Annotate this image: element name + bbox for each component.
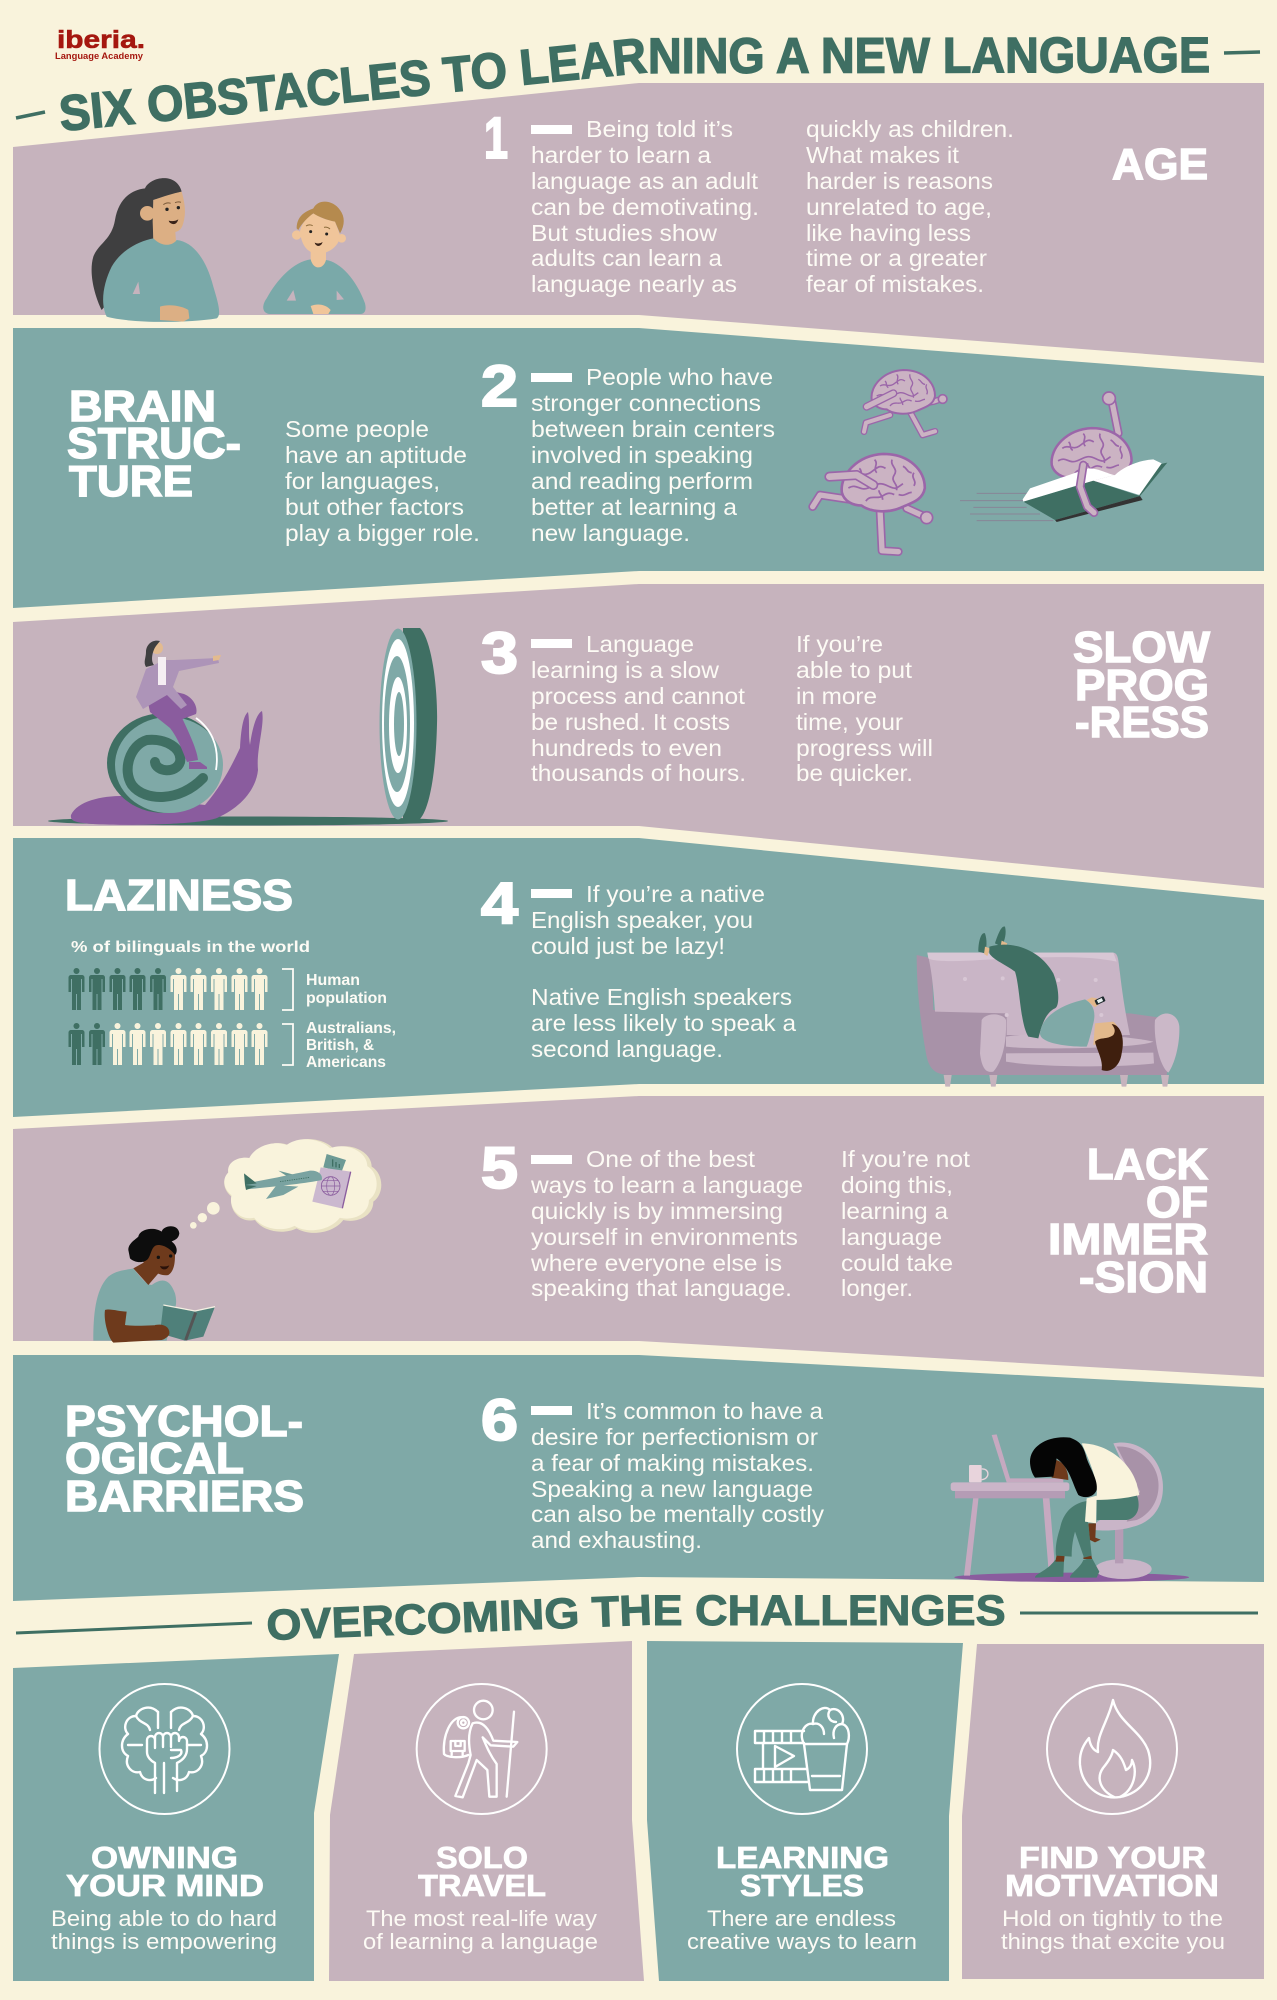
- text: more time: able to put: [796, 657, 913, 683]
- card text: There are endless: [707, 1906, 896, 1931]
- text: connections: People who have: [586, 364, 773, 390]
- text: native speaker: English speaker, you: [531, 907, 753, 933]
- heading: lack of immersion: OF: [1146, 1178, 1208, 1227]
- text: more time: in more: [796, 683, 877, 709]
- card heading: [66, 1840, 264, 1903]
- card heading: [1005, 1840, 1219, 1903]
- card heading: [418, 1840, 546, 1903]
- text: if not: [841, 1146, 971, 1301]
- text: if not: language: [841, 1224, 942, 1250]
- text: perfectionism: Speaking a new language: [531, 1476, 813, 1502]
- panel: lack of immersion: [13, 1096, 1264, 1377]
- card text: The most real-life way: [366, 1906, 597, 1931]
- card text: [51, 1906, 277, 1954]
- text: slow process: learning is a slow: [531, 657, 719, 683]
- text: age left: harder to learn a: [531, 142, 711, 168]
- panel: laziness: [13, 838, 1264, 1117]
- card text: [363, 1906, 598, 1954]
- text: if not: longer.: [841, 1275, 913, 1301]
- text: slow process: be rushed. It costs: [531, 709, 730, 735]
- heading: lack of immersion: LACK: [1087, 1140, 1208, 1189]
- text: if not: could take: [841, 1250, 953, 1276]
- card: solo travel: [329, 1641, 644, 1981]
- text: perfectionism: and exhausting.: [531, 1527, 702, 1553]
- text: if not: If you’re not: [841, 1146, 971, 1172]
- card: owning your mind: [13, 1654, 339, 1981]
- text: perfectionism: It’s common to have a: [586, 1398, 823, 1424]
- row: australians, british, americans: [68, 1023, 268, 1065]
- illustration: reader dreaming of travel: [93, 1139, 381, 1343]
- text: immersion: speaking that language.: [531, 1275, 792, 1301]
- number 1: 1: [484, 106, 508, 171]
- text: perfectionism: desire for perfectionism or: [531, 1424, 818, 1450]
- icon: hiker: [417, 1684, 547, 1814]
- text: aptitude: Some people: [285, 416, 429, 442]
- number 2: 2: [481, 354, 518, 419]
- reader: [93, 1226, 215, 1343]
- text: immersion: yourself in environments: [531, 1224, 798, 1250]
- panel: age: [13, 83, 1264, 363]
- brain runner bottom: [813, 454, 933, 552]
- heading: age: AGE: [1112, 140, 1208, 189]
- card heading: [716, 1840, 889, 1903]
- heading: psychological barriers: PSYCHOL-: [65, 1397, 303, 1446]
- number 4: 4: [481, 871, 518, 936]
- text: age right: like having less: [806, 220, 971, 246]
- card heading: MOTIVATION: [1005, 1868, 1219, 1903]
- text: more time: time, your: [796, 709, 903, 735]
- card heading: FIND YOUR: [1019, 1840, 1206, 1875]
- text: if not: doing this,: [841, 1172, 953, 1198]
- text: age left: But studies show: [531, 220, 717, 246]
- panel: psychological barriers: [13, 1355, 1264, 1601]
- text: immersion: [530, 1146, 803, 1301]
- heading: lack of immersion: [1048, 1140, 1208, 1302]
- text: perfectionism: can also be mentally costly: [531, 1501, 825, 1527]
- text: age right: unrelated to age,: [806, 194, 992, 220]
- text: age right: [806, 116, 1014, 297]
- card heading: SOLO: [436, 1840, 528, 1875]
- heading: brain structure: TURE: [69, 457, 193, 506]
- text: connections: involved in speaking: [531, 442, 753, 468]
- heading: brain structure: BRAIN: [69, 382, 216, 431]
- heading: slow progress: SLOW: [1073, 623, 1210, 672]
- text: native speaker: are less likely to speak a: [531, 1010, 796, 1036]
- chart: percent of bilinguals: population: [306, 990, 387, 1007]
- text: aptitude: for languages,: [285, 468, 440, 494]
- text: age right: quickly as children.: [806, 116, 1014, 142]
- panel: brain structure: [13, 328, 1264, 608]
- title: SIX OBSTACLES TO LEARNING A NEW LANGUAGE: [60, 36, 1209, 131]
- text: immersion: One of the best: [586, 1146, 756, 1172]
- brain reader on book: [1023, 392, 1167, 522]
- card heading: STYLES: [740, 1868, 864, 1903]
- heading: psychological barriers: [65, 1397, 304, 1521]
- chart: percent of bilinguals: [68, 939, 396, 1071]
- card text: things is empowering: [51, 1929, 277, 1954]
- card text: creative ways to learn: [687, 1929, 917, 1954]
- illustration: person upside down on sofa: [917, 926, 1179, 1087]
- text: aptitude: but other factors: [285, 494, 464, 520]
- card heading: LEARNING: [716, 1840, 889, 1875]
- text: connections: stronger connections: [531, 390, 761, 416]
- text: more time: be quicker.: [796, 760, 913, 786]
- text: connections: and reading perform: [531, 468, 753, 494]
- text: slow process: hundreds to even: [531, 735, 722, 761]
- passport: [312, 1154, 351, 1208]
- illustration: exhausted person at desk: [951, 1434, 1189, 1582]
- text: age right: harder is reasons: [806, 168, 993, 194]
- text: age left: adults can learn a: [531, 245, 722, 271]
- text: age left: can be demotivating.: [531, 194, 759, 220]
- text: immersion: ways to learn a language: [530, 1172, 803, 1198]
- card: learning styles: [647, 1641, 963, 1981]
- text: connections: better at learning a: [531, 494, 737, 520]
- text: native speaker: [531, 881, 796, 1062]
- text: slow process: process and cannot: [531, 683, 746, 709]
- card text: of learning a language: [363, 1929, 598, 1954]
- chart: percent of bilinguals: Human: [306, 972, 360, 989]
- illustration: running brains with book: [813, 370, 1167, 552]
- text: aptitude: [285, 416, 480, 546]
- text: age right: time or a greater: [806, 245, 987, 271]
- airplane: [244, 1171, 322, 1199]
- text: aptitude: have an aptitude: [285, 442, 467, 468]
- icon: flame: [1047, 1684, 1177, 1814]
- chart: percent of bilinguals: British, &: [306, 1037, 374, 1054]
- brain runner top: [864, 370, 947, 435]
- number 5: 5: [481, 1136, 518, 1201]
- chart: percent of bilinguals: % of bilinguals in the world: [71, 939, 310, 956]
- heading: brain structure: STRUC-: [67, 419, 241, 468]
- text: more time: progress will: [796, 735, 933, 761]
- text: perfectionism: a fear of making mistakes.: [531, 1450, 814, 1476]
- text: if not: learning a: [841, 1198, 948, 1224]
- text: connections: [531, 364, 775, 546]
- dash: [531, 1155, 572, 1164]
- card: find your motivation: [962, 1644, 1264, 1979]
- text: slow process: [531, 631, 746, 786]
- subtitle: overcoming the challenges: OVERCOMING THE CHALLENGES: [268, 1594, 1004, 1640]
- logo: Language Academy: [55, 51, 143, 61]
- text: immersion: quickly is by immersing: [531, 1198, 783, 1224]
- heading: slow progress: [1073, 623, 1210, 747]
- heading: brain structure: [67, 382, 241, 506]
- text: aptitude: play a bigger role.: [285, 520, 480, 546]
- logo: [55, 26, 145, 61]
- text: more time: [796, 631, 933, 786]
- dash: [531, 373, 572, 382]
- heading: laziness: LAZINESS: [65, 871, 293, 920]
- card heading: OWNING: [91, 1840, 238, 1875]
- text: age left: language nearly as: [531, 271, 737, 297]
- card heading: TRAVEL: [418, 1868, 546, 1903]
- text: more time: If you’re: [796, 631, 883, 657]
- icon: film and popcorn: [737, 1684, 867, 1814]
- panel: slow progress: [13, 584, 1264, 888]
- chart: percent of bilinguals: Americans: [306, 1054, 386, 1071]
- dash: [531, 1406, 572, 1415]
- heading: slow progress: PROG: [1075, 661, 1209, 710]
- card text: [687, 1906, 917, 1954]
- text: native speaker: If you’re a native: [586, 881, 765, 907]
- text: age left: Being told it’s: [586, 116, 733, 142]
- text: age left: [531, 116, 759, 297]
- subtitle: overcoming the challenges: [16, 1594, 1258, 1640]
- dash: [531, 639, 572, 648]
- illustration: woman and child: [92, 178, 366, 322]
- number 6: 6: [481, 1388, 518, 1453]
- text: native speaker: Native English speakers: [531, 984, 792, 1010]
- card text: [1001, 1906, 1225, 1954]
- text: connections: new language.: [531, 520, 690, 546]
- text: perfectionism: [531, 1398, 825, 1553]
- card text: things that excite you: [1001, 1929, 1225, 1954]
- text: slow process: thousands of hours.: [531, 760, 746, 786]
- thought cloud: [190, 1139, 381, 1233]
- heading: psychological barriers: OGICAL: [65, 1434, 244, 1483]
- illustration: woman riding snail toward target: [48, 628, 448, 826]
- text: age right: What makes it: [806, 142, 960, 168]
- text: immersion: where everyone else is: [530, 1250, 782, 1276]
- text: connections: between brain centers: [531, 416, 775, 442]
- card text: Hold on tightly to the: [1002, 1906, 1223, 1931]
- heading: lack of immersion: -SION: [1079, 1253, 1208, 1302]
- card text: Being able to do hard: [51, 1906, 277, 1931]
- icon: brain and fist: [100, 1684, 230, 1814]
- heading: slow progress: -RESS: [1075, 698, 1209, 747]
- text: slow process: Language: [586, 631, 694, 657]
- heading: lack of immersion: IMMER: [1048, 1215, 1208, 1264]
- heading: psychological barriers: BARRIERS: [65, 1472, 304, 1521]
- logo: iberia.: [57, 26, 145, 54]
- speed lines: [960, 493, 1053, 521]
- dash: [531, 889, 572, 898]
- text: age left: language as an adult: [531, 168, 759, 194]
- text: age right: fear of mistakes.: [806, 271, 984, 297]
- text: native speaker: second language.: [531, 1036, 723, 1062]
- text: native speaker: could just be lazy!: [531, 933, 725, 959]
- dash: [531, 125, 572, 134]
- row: human population: [68, 968, 268, 1010]
- number 3: 3: [481, 621, 518, 686]
- chart: percent of bilinguals: Australians,: [306, 1020, 396, 1037]
- card heading: YOUR MIND: [66, 1868, 264, 1903]
